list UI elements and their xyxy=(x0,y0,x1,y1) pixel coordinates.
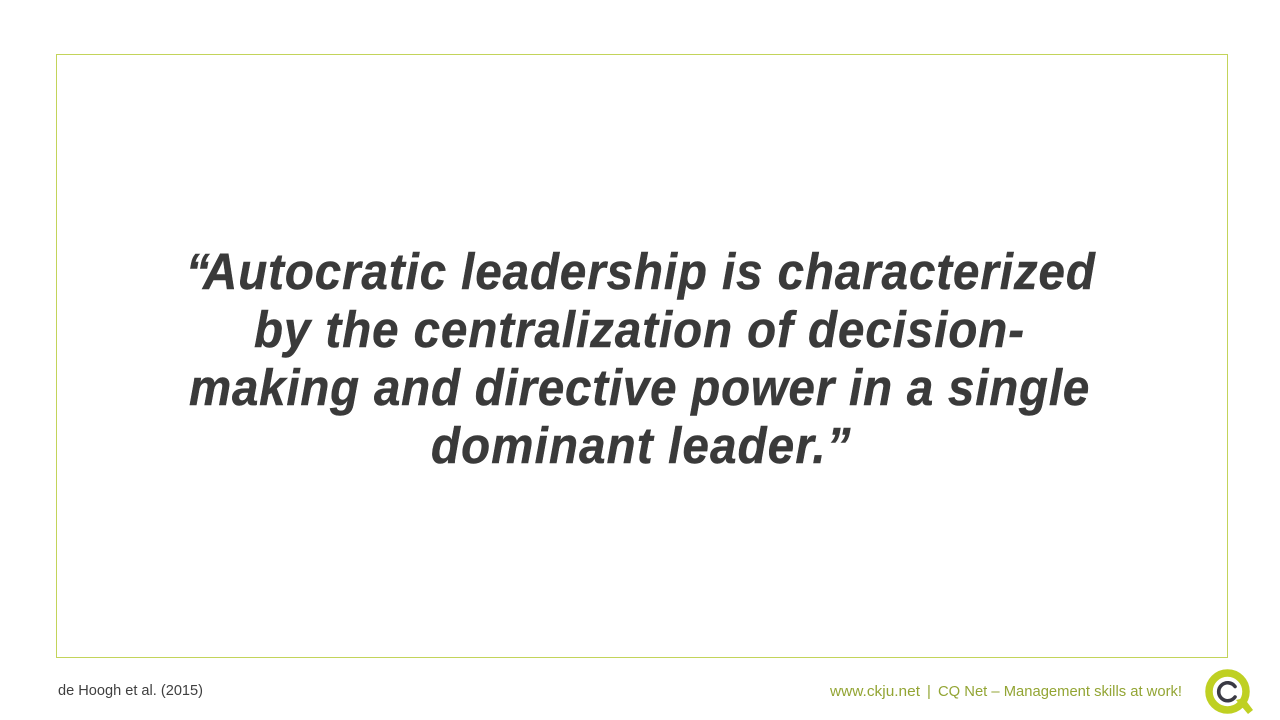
icon: CQ logo xyxy=(1209,673,1253,714)
footer tagline: | xyxy=(927,683,931,700)
footer tagline xyxy=(829,683,1182,700)
source citation: de Hoogh et al. (2015) xyxy=(58,682,203,699)
quote text: “ xyxy=(186,243,210,300)
panel: quote frame xyxy=(56,54,1228,658)
quote text: by the centralization of decision- xyxy=(254,301,1024,358)
quote text: dominant leader.” xyxy=(431,417,851,474)
footer tagline: www.ckju.net xyxy=(829,683,921,700)
quote text: Autocratic leadership is characterized xyxy=(201,243,1096,300)
footer tagline: CQ Net – Management skills at work! xyxy=(938,683,1182,700)
quote text: making and directive power in a single xyxy=(189,359,1089,416)
quote text xyxy=(186,243,1096,474)
